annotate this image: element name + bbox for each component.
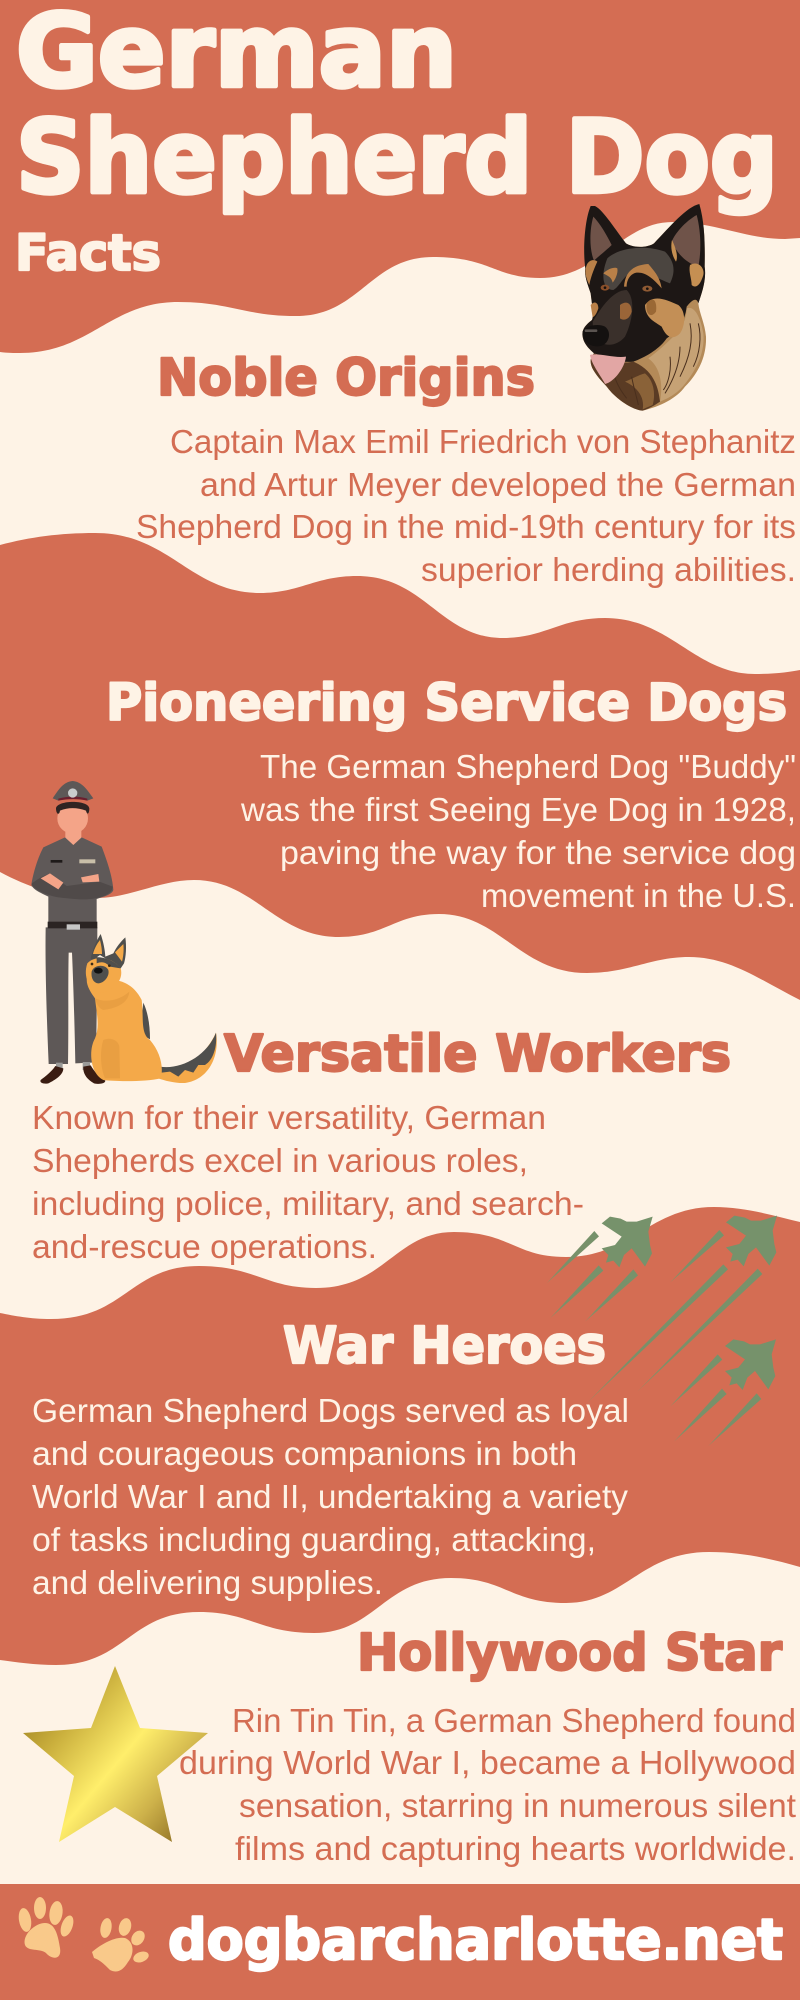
jet 2	[587, 1216, 777, 1403]
tongue	[590, 354, 626, 384]
icon: gold star	[23, 1666, 208, 1842]
icon: paw print 1	[17, 1897, 76, 1958]
text block: hollywood star: sensation, starring in numerous silent	[239, 1787, 796, 1824]
text block: pioneering service dogs: The German Shepherd Dog "Buddy"	[260, 748, 796, 785]
text block: hollywood star	[179, 1702, 796, 1867]
panel: header wave band	[0, 0, 800, 353]
silhouette	[582, 204, 706, 411]
text block: versatile workers	[32, 1099, 584, 1265]
nose	[583, 325, 609, 346]
officer	[31, 781, 113, 1084]
fur strokes	[613, 323, 700, 405]
text block: pioneering service dogs: was the first Seeing Eye Dog in 1928,	[240, 791, 796, 828]
cheek tan	[645, 299, 684, 337]
brow markings	[624, 264, 662, 288]
text block: war heroes	[32, 1392, 629, 1601]
text block: versatile workers: Known for their versatility, German	[32, 1099, 546, 1136]
text block: war heroes: and delivering supplies.	[32, 1564, 383, 1601]
icon: fighter jets with trails	[547, 1216, 777, 1446]
footer website text: dogbarcharlotte.net	[168, 1908, 783, 1973]
heading: noble origins: Noble Origins	[157, 349, 535, 408]
text block: versatile workers: and-rescue operations.	[32, 1228, 377, 1265]
icon: police officer and dog	[31, 781, 217, 1084]
text block: pioneering service dogs: paving the way for the service dog	[280, 834, 796, 871]
text block: noble origins: Captain Max Emil Friedrich von Stephanitz	[170, 423, 796, 460]
heading: pioneering service dogs: Pioneering Service Dogs	[106, 674, 787, 733]
text block: war heroes: and courageous companions in both	[32, 1435, 577, 1472]
text block: hollywood star: during World War I, became a Hollywood	[179, 1744, 796, 1781]
title	[15, 0, 778, 282]
icon: paw print 2	[92, 1917, 150, 1971]
text block: pioneering service dogs: movement in the U.S.	[481, 877, 796, 914]
text block: noble origins	[136, 423, 796, 588]
forehead	[603, 248, 674, 290]
panel: footer band	[0, 1884, 800, 2000]
text block: hollywood star: Rin Tin Tin, a German Shepherd found	[232, 1702, 796, 1739]
icon: german shepherd head	[582, 204, 706, 411]
text block: hollywood star: films and capturing hearts worldwide.	[235, 1830, 796, 1867]
muzzle	[593, 290, 632, 345]
lower dark-brown fur	[591, 353, 660, 411]
text block: noble origins: and Artur Meyer developed the German	[200, 466, 796, 503]
ears inner	[590, 217, 612, 261]
jet 3	[670, 1339, 776, 1446]
text block: pioneering service dogs	[240, 748, 796, 914]
text block: noble origins: superior herding abilities.	[421, 551, 796, 588]
heading: hollywood star: Hollywood Star	[357, 1624, 782, 1683]
text block: war heroes: German Shepherd Dogs served as loyal	[32, 1392, 629, 1429]
panel: war heroes wave band	[0, 1207, 800, 1665]
panel: pioneering service dogs wave band	[0, 533, 800, 1000]
text block: versatile workers: including police, military, and search-	[32, 1185, 584, 1222]
heading: versatile workers: Versatile Workers	[224, 1025, 731, 1084]
eyes	[601, 285, 609, 291]
dog	[86, 934, 217, 1083]
heading: war heroes: War Heroes	[283, 1317, 606, 1376]
right chest fur	[648, 308, 704, 402]
text block: noble origins: Shepherd Dog in the mid-19th century for its	[136, 508, 796, 545]
title: Facts	[15, 224, 161, 282]
dark face mask	[582, 204, 705, 362]
text block: war heroes: World War I and II, undertaking a variety	[32, 1478, 629, 1515]
text block: versatile workers: Shepherds excel in various roles,	[32, 1142, 528, 1179]
jet 1	[547, 1217, 653, 1322]
text block: war heroes: of tasks including guarding, attacking,	[32, 1521, 596, 1558]
